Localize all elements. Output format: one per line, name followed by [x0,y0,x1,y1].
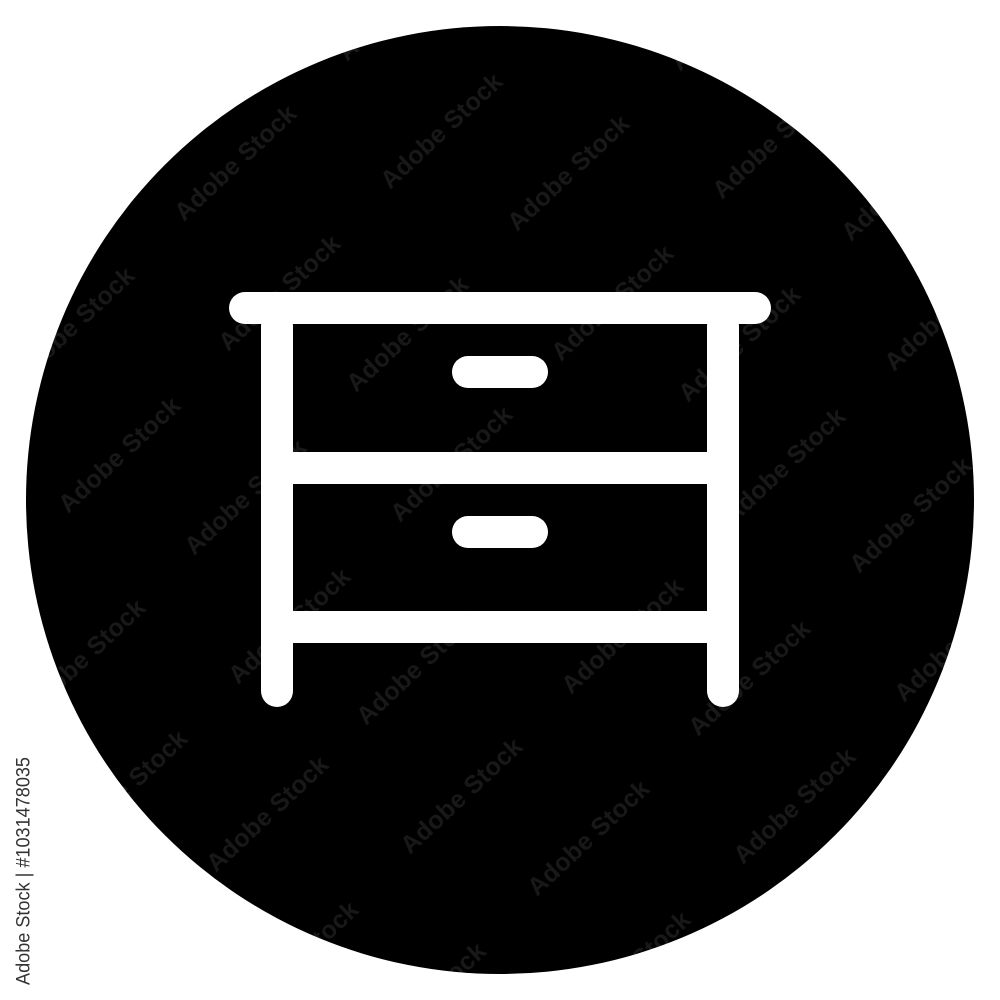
watermark: be Stock [267,896,364,988]
watermark: tock [765,941,823,997]
watermark: Adobe Stock [844,451,977,578]
left leg [261,310,293,707]
watermark: Adobe Stock [41,54,174,181]
watermark: Adobe Stock [223,562,356,689]
lower drawer handle [452,516,548,548]
watermark: Adobe Stock [385,400,518,527]
watermark: Adobe Stock [836,119,969,246]
watermark: Adobe Stock [728,742,861,869]
watermark: Adobe Stock [718,402,851,529]
watermark: Adobe Stock [341,270,474,397]
watermark: dobe Stock [74,878,194,992]
watermark: Adobe Stock [707,77,840,204]
watermark: Adobe Stock [351,603,484,730]
watermark: Adobe Stock [213,229,346,356]
middle shelf [280,452,720,484]
watermark: Adobe Stock [673,280,806,407]
watermark: Adobe Stock [556,572,689,699]
watermark: be Stock [599,906,696,998]
watermark: Adobe Stock [395,732,528,859]
cabinet top [229,292,771,324]
watermark: Adobe Stock [683,614,816,741]
watermark: tock [434,937,492,993]
watermark: Adobe Stock [53,391,186,518]
upper drawer handle [452,356,548,388]
watermark: Adobe Stock [851,782,984,909]
watermark: Adobe Stock [169,99,302,226]
watermark: Adobe Stock [375,67,508,194]
watermark: Adobe Stock [18,593,151,720]
watermark: Adobe Stock [179,433,312,560]
right leg [707,310,739,707]
cabinet [229,292,771,707]
watermark: Adobe Stock [502,109,635,236]
watermark: Adobe Stock [522,774,655,901]
stock id side text: Adobe Stock | #1031478035 [14,757,34,985]
bottom shelf [280,611,720,643]
watermark: Adobe Stock [201,750,334,877]
watermark: Adobe Stock [60,724,193,851]
watermark: Adobe Stock [546,239,679,366]
watermark: Adobe Stock [7,261,140,388]
